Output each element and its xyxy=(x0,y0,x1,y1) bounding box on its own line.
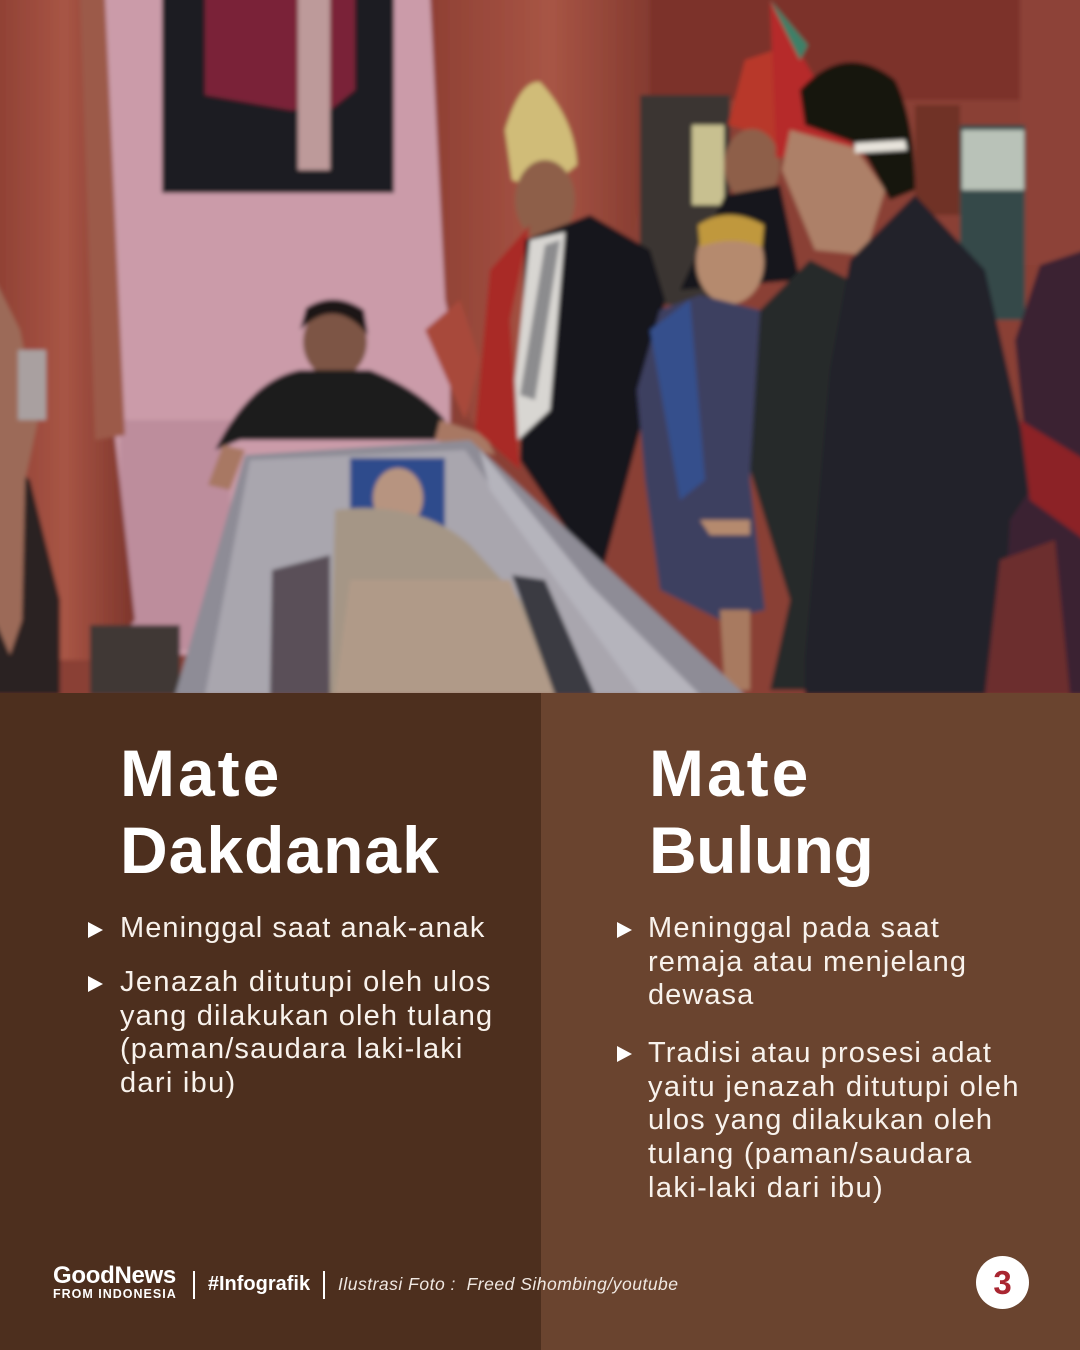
boy in black xyxy=(770,0,855,158)
footer logo: GoodNews xyxy=(53,1262,177,1301)
point: tradition xyxy=(648,1037,1020,1204)
bullet marker xyxy=(88,976,103,992)
footer logo: GoodNews: GoodNews xyxy=(53,1262,176,1289)
woman dark xyxy=(750,260,850,690)
bullet marker xyxy=(617,922,632,938)
list: Mate Dakdanak points xyxy=(88,912,493,1099)
coffin xyxy=(175,440,745,695)
footer logo: GoodNews: FROM INDONESIA xyxy=(53,1287,177,1301)
left person xyxy=(0,450,60,695)
point: ulos: (paman/saudara laki-laki xyxy=(120,1033,464,1065)
point: ulos: Jenazah ditutupi oleh ulos xyxy=(120,966,492,998)
list: Mate Bulung points xyxy=(617,912,1020,1204)
point: age: remaja atau menjelang xyxy=(648,946,967,978)
panel: Mate Dakdanak xyxy=(0,693,541,1350)
point: tradition: ulos yang dilakukan oleh xyxy=(648,1104,993,1136)
point: ulos xyxy=(120,966,493,1099)
heading: Mate Bulung: Bulung xyxy=(649,813,873,887)
point: tradition: tulang (paman/saudara xyxy=(648,1138,973,1170)
point: tradition: Tradisi atau prosesi adat xyxy=(648,1037,992,1069)
page number badge xyxy=(976,1256,1029,1309)
bullet marker xyxy=(88,922,103,938)
point: age: dewasa xyxy=(648,979,754,1011)
panel: Mate Bulung xyxy=(541,693,1080,1350)
point: age xyxy=(648,912,967,1011)
man in red and suit xyxy=(505,82,577,190)
point: age: Meninggal pada saat xyxy=(648,912,940,944)
point: ulos: dari ibu) xyxy=(120,1067,236,1099)
point: age: Meninggal saat anak-anak xyxy=(120,912,485,944)
heading: Mate Dakdanak: Mate xyxy=(120,736,282,810)
hashtag: #Infografik: #Infografik xyxy=(208,1273,310,1295)
point: tradition: yaitu jenazah ditutupi oleh xyxy=(648,1071,1020,1103)
bullet marker xyxy=(617,1046,632,1062)
point: ulos: yang dilakukan oleh tulang xyxy=(120,1000,493,1032)
heading: Mate Bulung xyxy=(649,736,873,887)
photo: family around coffin xyxy=(0,0,1080,693)
point: tradition: laki-laki dari ibu) xyxy=(648,1172,884,1204)
hashtag: #Infografik xyxy=(193,1271,325,1299)
heading: Mate Bulung: Mate xyxy=(649,736,811,810)
woman seated xyxy=(303,306,367,378)
back boy xyxy=(728,50,780,160)
page number badge: 3 xyxy=(993,1264,1012,1301)
photo credit: Ilustrasi Foto : Freed Sihombing/youtube xyxy=(338,1274,679,1294)
right figure xyxy=(1000,250,1080,695)
girl xyxy=(696,220,764,304)
heading: Mate Dakdanak xyxy=(120,736,440,887)
heading: Mate Dakdanak: Dakdanak xyxy=(120,813,440,887)
